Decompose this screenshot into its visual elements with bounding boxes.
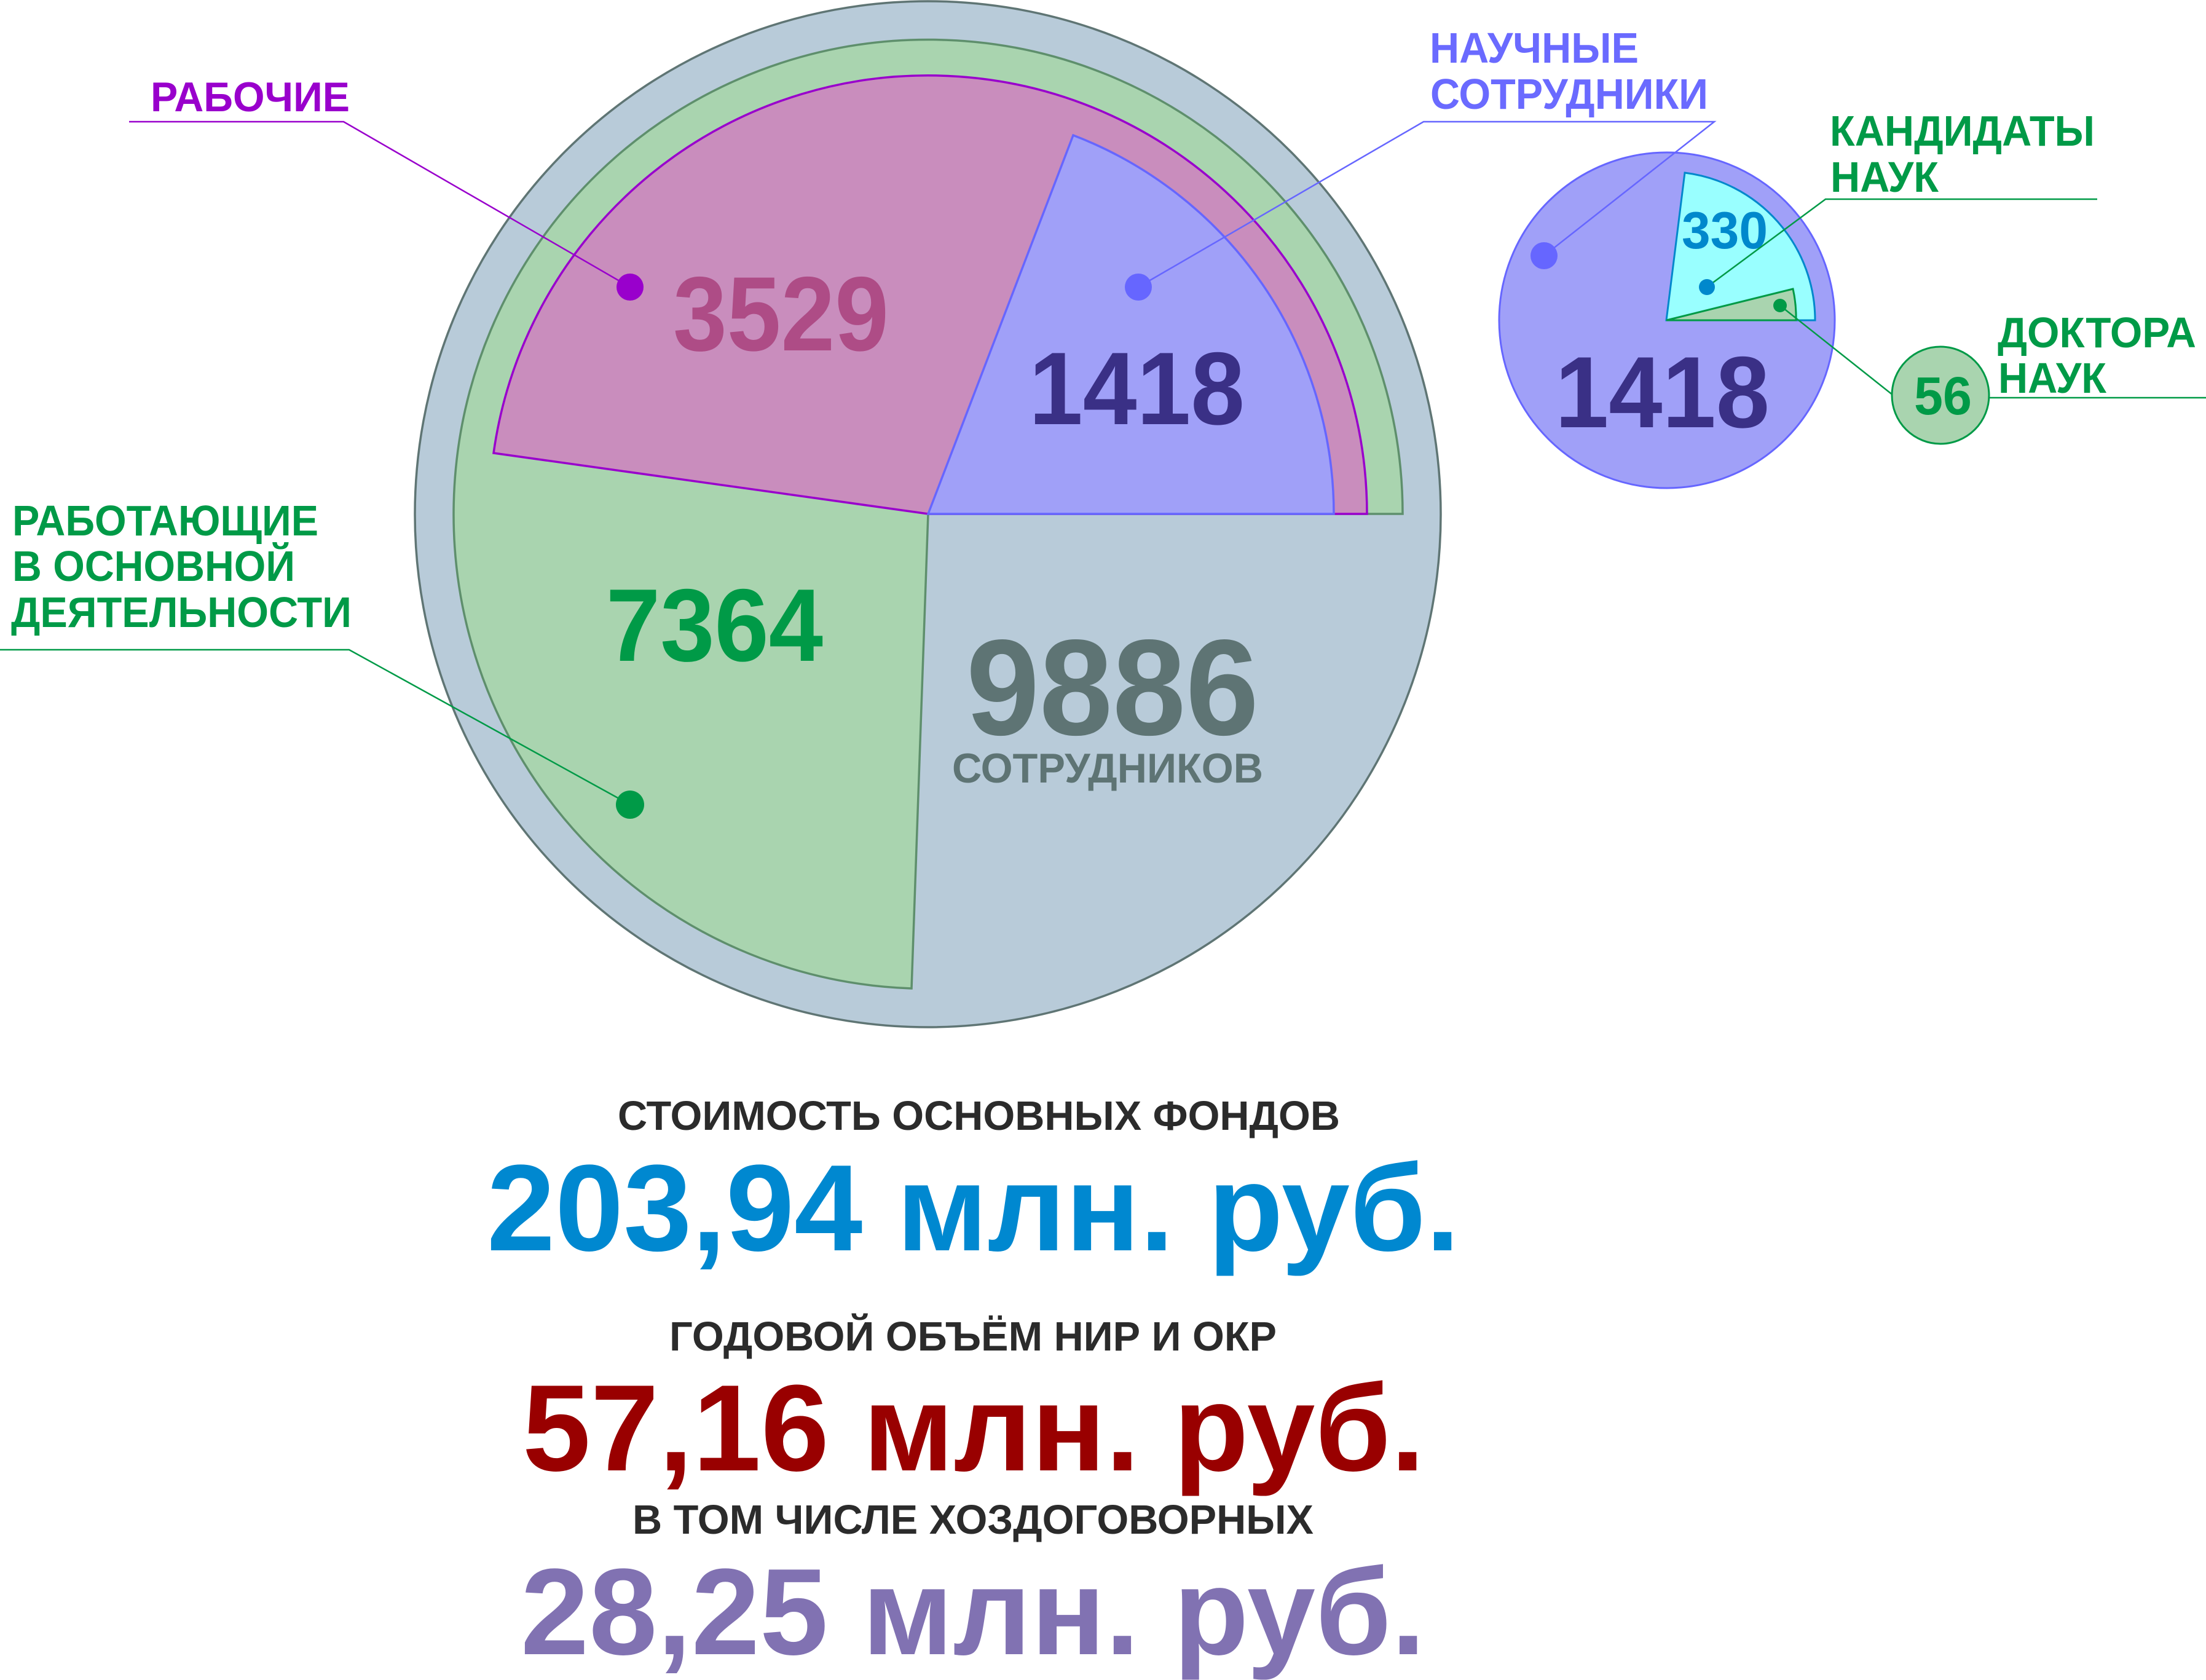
text block: contract work: В ТОМ ЧИСЛЕ ХОЗДОГОВОРНЫХ: [632, 1497, 1314, 1543]
value: 9886: 9886: [966, 612, 1259, 764]
text block: contract work: 28,25 млн. руб.: [521, 1544, 1425, 1680]
callout: workers: [129, 74, 644, 301]
callout: research staff: [1125, 24, 1714, 301]
sector: core activity staff: [454, 39, 1403, 988]
callout: core activity staff: В ОСНОВНОЙ: [12, 542, 295, 590]
text block: annual research volume: ГОДОВОЙ ОБЪЁМ НИР И ОКР: [669, 1313, 1277, 1360]
value: 330: 330: [1682, 202, 1768, 260]
text block: fixed assets: СТОИМОСТЬ ОСНОВНЫХ ФОНДОВ: [618, 1093, 1340, 1139]
callout: doctors of science: 56: [1914, 366, 1972, 426]
callout: research staff: НАУЧНЫЕ: [1430, 24, 1639, 72]
outer circle: all staff: [415, 1, 1441, 1027]
circle: research staff: [1499, 152, 1835, 488]
callout: core activity staff: ДЕЯТЕЛЬНОСТИ: [11, 588, 352, 636]
callout: core activity staff: РАБОТАЮЩИЕ: [12, 497, 318, 545]
caption: staff: СОТРУДНИКОВ: [952, 745, 1263, 792]
panel: main staff pie chart: [415, 1, 1441, 1027]
callout: doctors of science: ДОКТОРА: [1998, 309, 2196, 357]
callout: research staff: СОТРУДНИКИ: [1430, 70, 1708, 118]
callout: doctors of science: [1773, 299, 2206, 444]
sector: workers: [494, 76, 1367, 514]
callout: candidates of science: КАНДИДАТЫ: [1830, 107, 2095, 155]
sector: candidates of science: [1666, 173, 1815, 320]
value: 7364: 7364: [606, 567, 823, 683]
panel: research staff pie chart: [1499, 152, 1835, 488]
value: 1418 in main pie: 1418: [1029, 331, 1245, 446]
callout: workers: РАБОЧИЕ: [151, 74, 350, 120]
callout: candidates of science: [1699, 107, 2097, 295]
callout: candidates of science: НАУК: [1830, 153, 1939, 201]
value: 1418 in research pie: 1418: [1555, 336, 1770, 449]
text block: fixed assets: 203,94 млн. руб.: [487, 1140, 1460, 1277]
text block: annual research volume: 57,16 млн. руб.: [522, 1360, 1425, 1497]
callout: doctors of science: НАУК: [1998, 354, 2106, 402]
callout: core activity staff: [0, 497, 644, 819]
sector: doctors of science: [1666, 289, 1796, 320]
value: 3529: 3529: [673, 255, 889, 373]
sector: research staff: [928, 135, 1334, 514]
